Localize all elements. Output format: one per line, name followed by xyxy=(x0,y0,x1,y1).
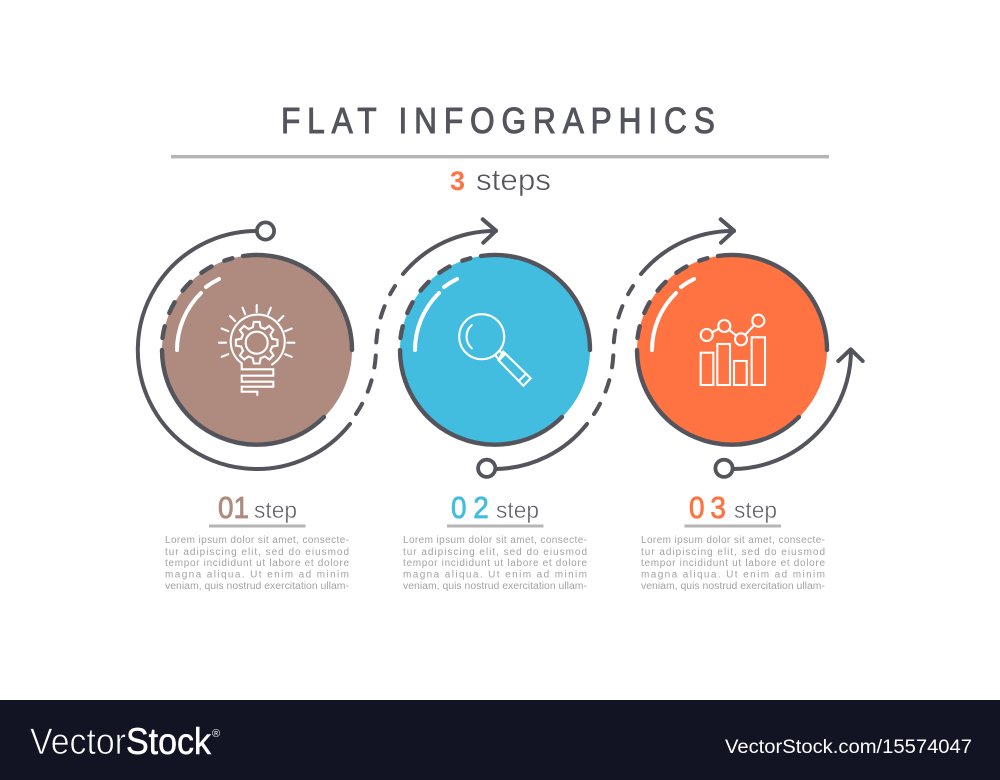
step 2 text block: tur adipiscing elit, sed do eiusmod xyxy=(403,547,587,558)
step 3 text block: tur adipiscing elit, sed do eiusmod xyxy=(641,547,825,558)
step 1 label: 01 xyxy=(218,490,249,525)
icon: magnifying glass xyxy=(459,314,531,386)
step 2 text block: tempor incididunt ut labore et dolore xyxy=(403,558,587,569)
arrow: step 2 lower arc with knob xyxy=(478,424,587,477)
footer image id: VectorStock.com/15574047 xyxy=(725,737,972,758)
arrow: step 1 outer arc with knob xyxy=(138,222,350,469)
circle: step 3 orange disc xyxy=(637,255,827,445)
step 2 text block: magna aliqua. Ut enim ad minim xyxy=(403,570,587,580)
circle: step 1 brown disc xyxy=(162,255,352,445)
step 3 label: step xyxy=(734,497,777,523)
step 1 text block: tempor incididunt ut labore et dolore xyxy=(165,558,349,569)
step 1 text block: veniam, quis nostrud exercitation ullam- xyxy=(165,581,349,592)
step 2 text block xyxy=(403,535,587,592)
footer bar xyxy=(0,700,1000,780)
footer logo: Stock xyxy=(126,721,211,762)
subtitle: 3 steps: steps xyxy=(476,164,551,197)
step 2 label: step xyxy=(496,497,539,523)
panel: step 2 xyxy=(356,219,590,592)
step 3 text block xyxy=(641,535,825,592)
title: FLAT INFOGRAPHICS xyxy=(281,101,715,141)
arrow: step 3 outgoing arc with knob xyxy=(715,349,863,477)
step 2 text block: veniam, quis nostrud exercitation ullam- xyxy=(403,581,587,592)
step 3 text block: Lorem ipsum dolor sit amet, consecte- xyxy=(641,535,825,546)
step 1 text block: tur adipiscing elit, sed do eiusmod xyxy=(165,547,349,558)
panel: step 1 xyxy=(138,222,352,592)
footer logo: Vector xyxy=(30,721,126,762)
step 2 label xyxy=(447,491,544,528)
footer logo: ® xyxy=(212,728,220,740)
step 1 label: step xyxy=(254,497,297,523)
step 1 text block: Lorem ipsum dolor sit amet, consecte- xyxy=(165,535,349,546)
arrow: S-curve from step 1 to step 2 xyxy=(356,219,496,414)
subtitle: 3 steps: 3 xyxy=(450,166,465,196)
step 1 text block: magna aliqua. Ut enim ad minim xyxy=(165,570,349,580)
icon: light bulb with gear xyxy=(219,305,294,395)
step 2 text block: Lorem ipsum dolor sit amet, consecte- xyxy=(403,535,587,546)
title rule xyxy=(171,155,829,158)
arrow: S-curve from step 2 to step 3 xyxy=(594,219,734,414)
step 1 label xyxy=(209,490,306,528)
step 3 label xyxy=(684,491,781,528)
panel: step 3 xyxy=(594,219,863,592)
icon: bar chart with line xyxy=(701,315,765,385)
step 3 label: 03 xyxy=(689,491,726,525)
step 2 label: 02 xyxy=(451,491,489,525)
step 1 text block xyxy=(165,535,349,592)
step 3 text block: tempor incididunt ut labore et dolore xyxy=(641,558,825,569)
step 3 text block: veniam, quis nostrud exercitation ullam- xyxy=(641,581,825,592)
footer logo xyxy=(30,721,220,762)
step 3 text block: magna aliqua. Ut enim ad minim xyxy=(641,570,825,580)
circle: step 2 blue disc xyxy=(400,255,590,445)
